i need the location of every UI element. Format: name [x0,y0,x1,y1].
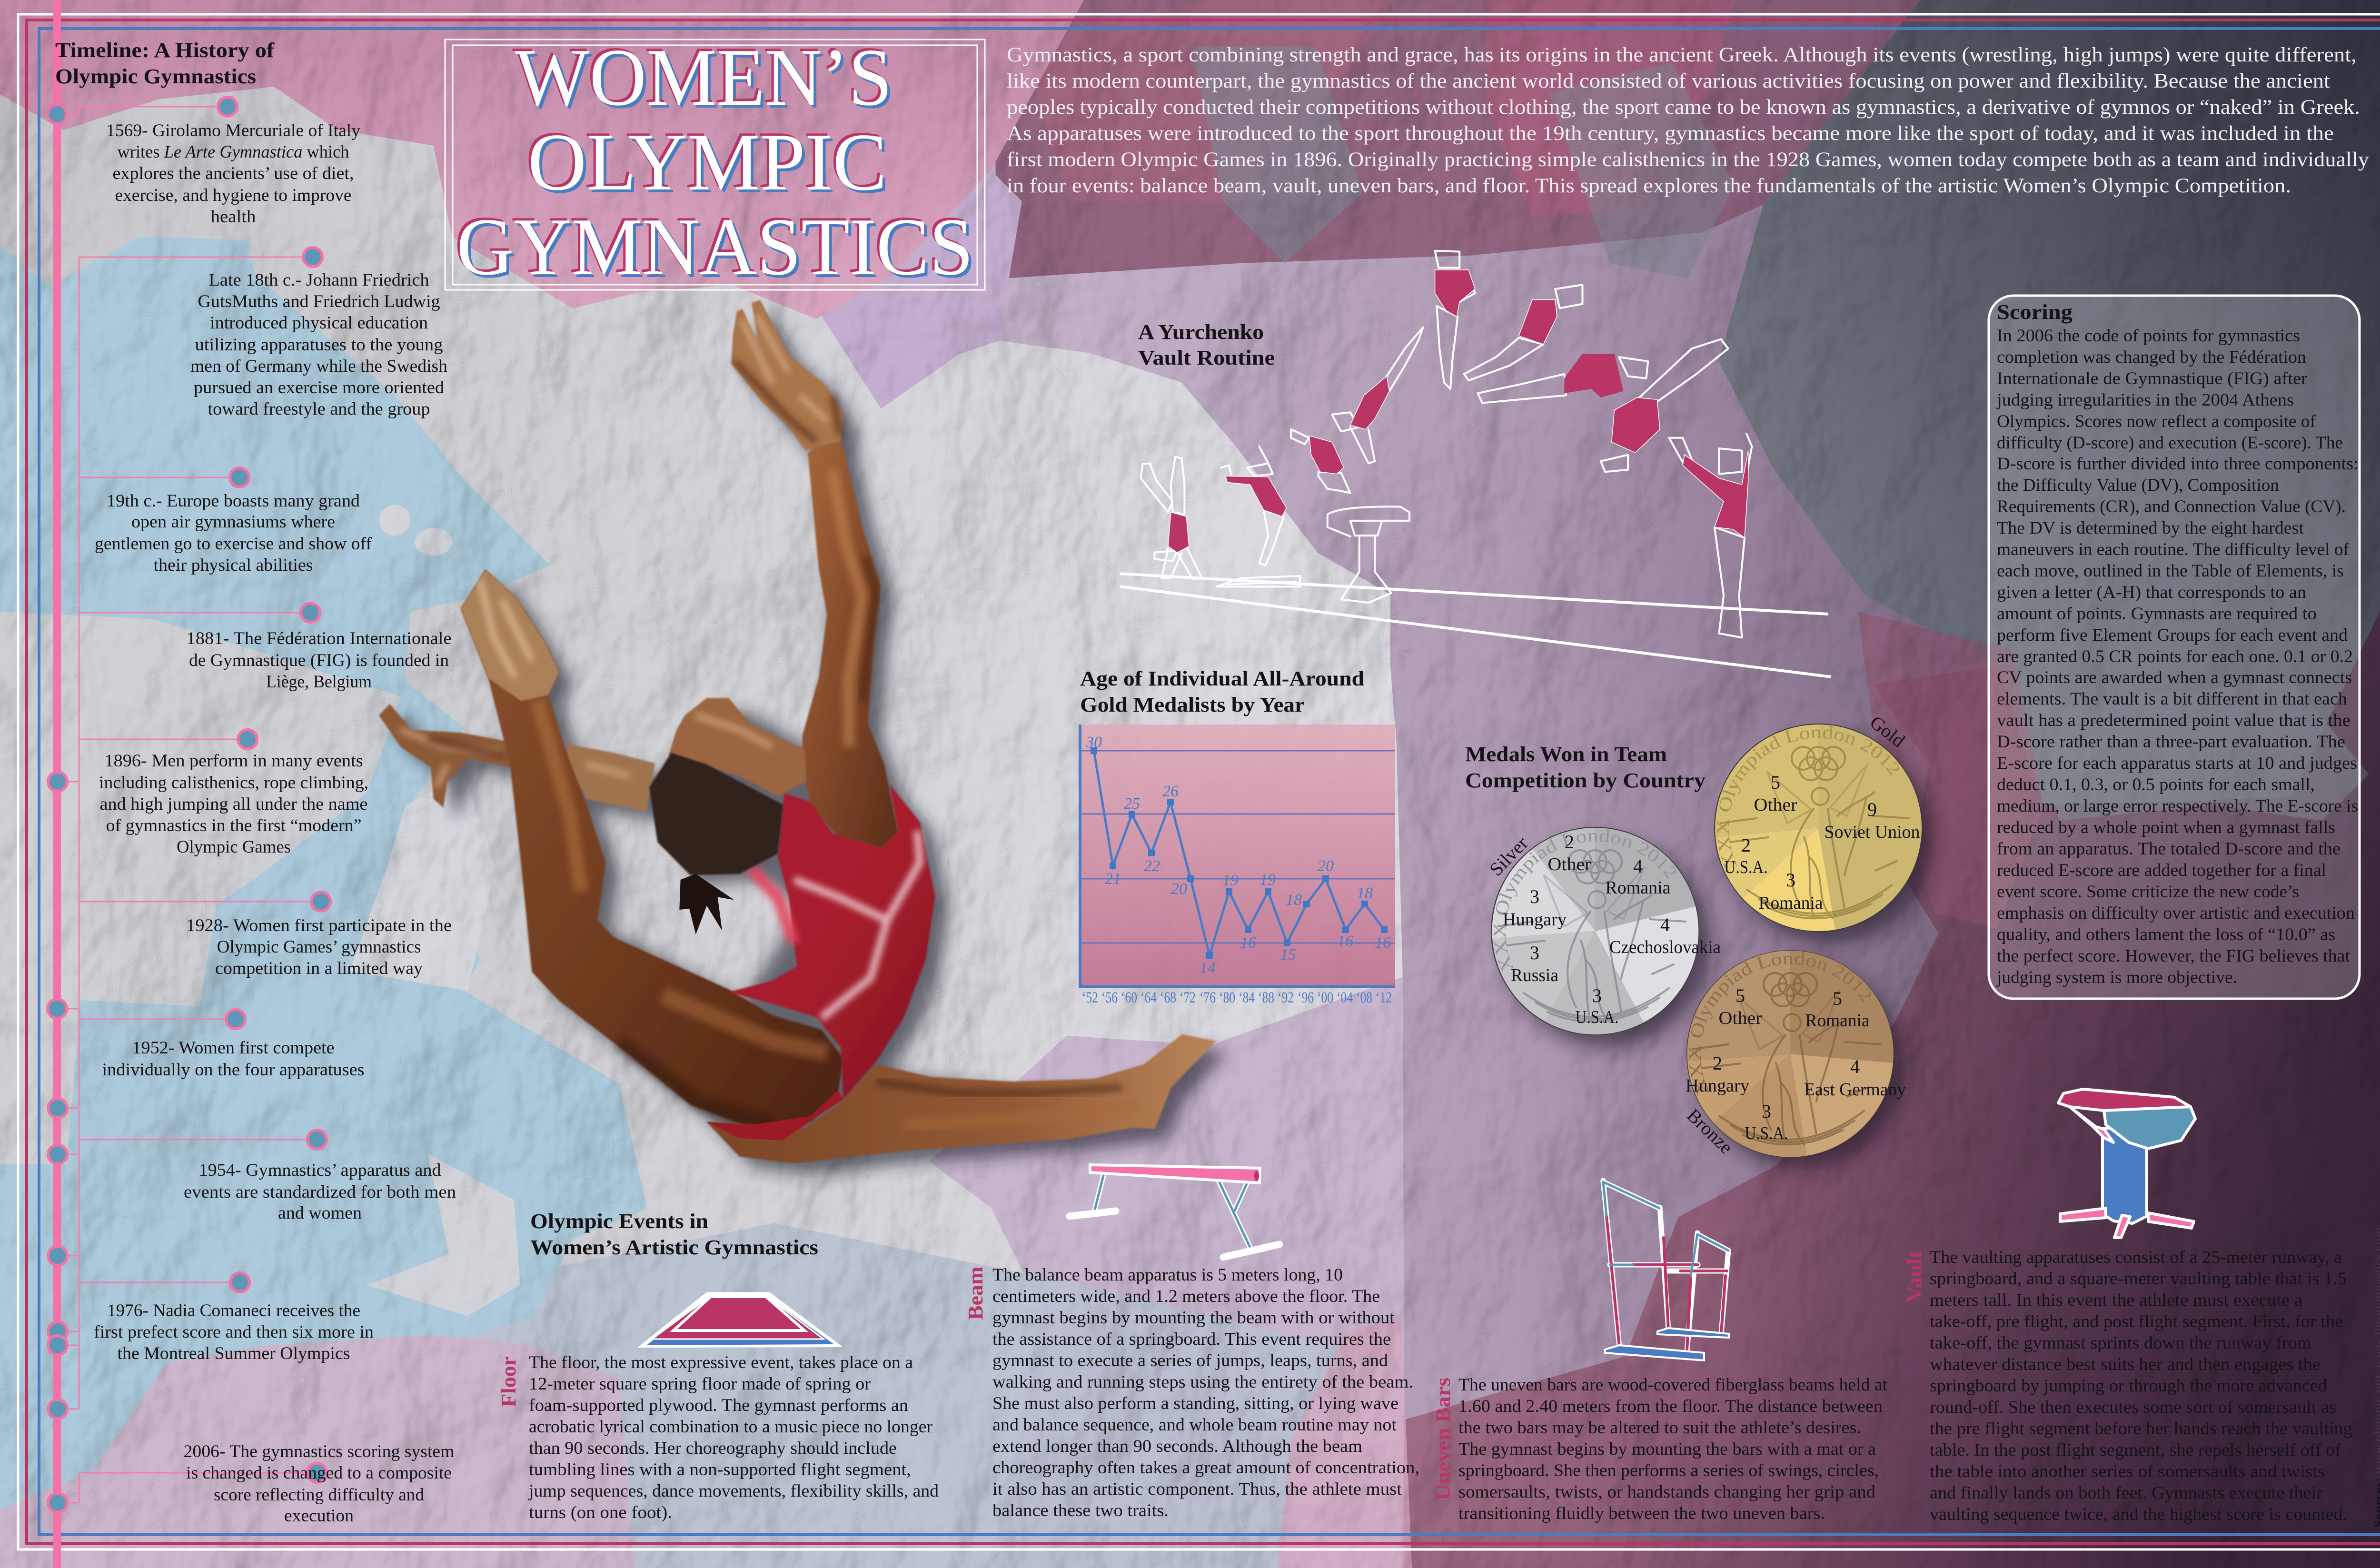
line chart: age by year: ‘60 [1121,989,1137,1006]
red leotard [707,784,935,1141]
medal pie chart: bronze: 2 [1713,1052,1722,1074]
line chart: age by year: 18 [1357,884,1373,902]
intro paragraph [1007,44,2370,197]
text: beam description: centimeters wide, and 1.2 meters above the floor. The [992,1287,1380,1306]
heading: age chart: Gold Medalists by Year [1080,693,1305,716]
title [445,30,985,295]
panel: scoring: difficulty (D-score) and execution (E-score). The [1997,433,2343,453]
text: beam description: it also has an artistic component. Thus, the athlete must [992,1479,1402,1499]
heading: A Yurchenko Vault Routine: A Yurchenko [1138,320,1264,344]
medal pie chart: bronze [1683,948,1906,1169]
panel: scoring: Requirements (CR), and Connection Value (CV). [1997,497,2346,516]
gymnast drop shadow [393,315,1228,1174]
medal pie chart: gold: Romania [1758,893,1823,913]
text: beam description: the assistance of a springboard. This event requires the [992,1330,1391,1349]
panel: scoring: amount of points. Gymnasts are required to [1997,604,2317,624]
timeline entry: 1976: 1976- Nadia Comaneci receives the [107,1300,360,1320]
intro paragraph: like its modern counterpart, the gymnastics of the ancient world consisted of various activities focusing on power and flexibility. Because the ancient [1007,70,2330,92]
text: vault description: meters tall. In this event the athlete must execute a [1930,1290,2302,1310]
timeline entry: late 18th century: GutsMuths and Friedrich Ludwig [198,291,440,311]
text: uneven bars description [1458,1375,1888,1523]
timeline axis [48,0,330,1568]
panel: scoring: elements. The vault is a bit different in that each [1997,689,2347,709]
springboard outline [1216,576,1300,586]
timeline entry: 1976: the Montreal Summer Olympics [117,1343,350,1363]
medal pie chart: gold: Soviet Union [1824,822,1920,842]
text: beam description: extend longer than 90 seconds. Although the beam [992,1437,1362,1456]
line chart: age by year: ‘52 [1082,989,1098,1006]
section label: Uneven Bars: Uneven Bars [1431,1378,1455,1500]
text: vault description: take-off, pre flight, and post flight segment. First, for the [1930,1312,2343,1331]
timeline entry: 1928 [186,915,452,978]
medal pie chart: bronze: Bronze [1683,1104,1737,1158]
timeline entry: 19th century [95,491,372,575]
medal pie chart: bronze: Hungary [1686,1076,1749,1096]
panel: scoring: vault has a predetermined point value that is the [1997,711,2350,730]
medal pie chart: silver: 4 [1660,914,1670,935]
text: vault description: and finally lands on both feet. Gymnasts execute their [1930,1483,2323,1503]
medal pie chart: bronze: U.S.A. [1745,1123,1788,1143]
title: OLYMPIC [527,117,887,208]
timeline entry: 1569: writes Le Arte Gymnastica which [117,142,349,161]
text: vault description: table. In the post flight segment, she repels herself off of [1930,1440,2341,1460]
text: vault description: round-off. She then executes some sort of somersault as [1930,1398,2336,1417]
figure 2: round-off [1221,447,1287,566]
raised leg and thigh [461,569,843,1128]
heading: age chart [1080,667,1364,716]
icon: uneven bars [1603,1181,1729,1360]
timeline entry: 1952 [102,1038,365,1079]
panel: scoring: E-score for each apparatus starts at 10 and judges [1997,754,2357,773]
timeline entry: 1881 [187,628,451,691]
heading: medals: Competition by Country [1465,769,1706,792]
timeline entry: 19th century: 19th c.- Europe boasts many grand [107,491,360,510]
head and hair [649,698,806,934]
timeline entry: 1569 [106,120,361,226]
timeline entry: 1952: 1952- Women first compete [132,1038,334,1057]
intro paragraph: peoples typically conducted their competitions without clothing, the sport came to be known as gymnastics, a derivative of gymnos or “naked” in Greek. [1007,96,2360,119]
medal pie chart: silver: Romania [1605,878,1671,898]
timeline entry: 1954: 1954- Gymnastics’ apparatus and [199,1160,441,1180]
panel: scoring: D-score rather than a three-part evaluation. The [1997,732,2345,752]
medal pie chart: silver: Other [1548,854,1591,874]
panel: scoring: judging irregularities in the 2004 Athens [1996,390,2294,410]
icon: floor mat [637,1292,843,1348]
timeline entry: 1928: competition in a limited way [215,958,423,978]
timeline entry: late 18th century: introduced physical education [210,313,428,332]
text: floor description: tumbling lines with a non-supported flight segment, [529,1460,911,1479]
line chart: age by year [1080,724,1395,1006]
title: GYMNASTICS [454,199,971,290]
medal pie chart: silver: 4 [1633,855,1643,877]
timeline entry: 1896: Olympic Games [177,837,291,856]
icon: balance beam [1070,1165,1279,1257]
line chart: age by year: ‘96 [1298,989,1314,1006]
timeline entry: 1952: individually on the four apparatuses [102,1060,365,1079]
text: uneven bars description: The gymnast begins by mounting the bars with a mat or a [1458,1439,1876,1459]
medal pie chart: gold: Other [1754,795,1797,815]
medal pie chart: silver: Silver [1485,833,1532,880]
intro paragraph: As apparatuses were introduced to the sport throughout the 19th century, gymnastics became more like the sport of today, and it was included in the [1007,122,2334,145]
text: beam description: walking and running steps using the entirety of the beam. [992,1372,1413,1392]
panel: scoring: In 2006 the code of points for gymnastics [1997,326,2300,346]
timeline entry: late 18th century: toward freestyle and the group [208,399,430,418]
panel: scoring: the perfect score. However, the FIG believes that [1997,946,2350,966]
medal pie chart: bronze: 4 [1850,1056,1860,1077]
line chart: age by year: ‘84 [1239,989,1255,1006]
timeline entry: 2006: score reflecting difficulty and [214,1485,424,1504]
medal pie chart: bronze: XXX Olympiad London 2012 [1685,948,1876,1098]
medal pie chart: gold: U.S.A. [1724,857,1768,877]
timeline entry: 2006: 2006- The gymnastics scoring system [184,1441,454,1461]
line chart: age by year: 21 [1105,870,1121,888]
line chart: age by year: ‘80 [1219,989,1235,1006]
timeline entry: late 18th century: utilizing apparatuses to the young [195,335,443,354]
figure 1: handstand on runway [1141,457,1202,579]
heading: age chart: Age of Individual All-Around [1080,667,1364,690]
panel: scoring: perform five Element Groups for each event and [1997,625,2348,645]
panel: scoring: are granted 0.5 CR points for each one. 0.1 or 0.2 [1997,647,2353,666]
timeline entry: 1976 [94,1300,374,1363]
section label: Beam: Beam [964,1267,987,1320]
panel: scoring: quality, and others lament the loss of “10.0” as [1997,925,2335,944]
medal pie chart: bronze: Other [1718,1008,1762,1028]
panel: scoring: given a letter (A-H) that corresponds to an [1997,583,2306,602]
panel: scoring: Olympics. Scores now reflect a composite of [1997,412,2316,431]
text: uneven bars description: somersaults, twists, or handstands changing her grip and [1458,1482,1875,1502]
panel: scoring: medium, or large error respectively. The E-score is [1997,796,2358,816]
text: beam description: She must also perform a standing, sitting, or lying wave [992,1394,1398,1413]
panel: scoring: reduced E-score are added together for a final [1997,861,2326,880]
figure 8: inverted descent [1601,339,1728,472]
text: vault description: vaulting sequence twice, and the highest score is counted. [1930,1505,2347,1524]
figure 9: landing [1669,434,1752,638]
panel: scoring: judging system is more objective. [1996,968,2237,987]
raised arm and hand [731,300,898,848]
panel: scoring: Internationale de Gymnastique (FIG) after [1997,369,2308,388]
title: GYMNASTICS [456,202,973,292]
heading: Olympic events: Olympic Events in [530,1210,708,1233]
timeline entry: 1928: Olympic Games’ gymnastics [217,937,421,956]
figure 5: rising vertical [1435,251,1475,389]
text: beam description: choreography often takes a great amount of concentration, [992,1458,1419,1478]
text: floor description: turns (on one foot). [529,1503,672,1522]
timeline heading [55,39,275,88]
text: vault description: the pre flight segment before her hands reach the vaulting [1930,1419,2352,1439]
panel: scoring: maneuvers in each routine. The difficulty level of [1997,540,2350,559]
title: OLYMPIC [526,115,884,205]
line chart: age by year: 18 [1286,891,1302,909]
intro paragraph: in four events: balance beam, vault, uneven bars, and floor. This spread explores the fundamentals of the artistic Women’s Olympic Competition. [1007,175,2291,197]
timeline entry: 1569: explores the ancients’ use of diet, [112,163,354,183]
text: floor description: jump sequences, dance movements, flexibility skills, and [528,1481,939,1501]
panel: scoring [1989,296,2360,999]
title: WOMEN’S [518,35,895,126]
text: uneven bars description: transitioning fluidly between the two uneven bars. [1458,1504,1825,1523]
text: floor description [528,1353,939,1522]
line chart: age by year: ‘00 [1317,989,1333,1006]
timeline entry: 1896: of gymnastics in the first “modern” [106,815,362,835]
timeline entry: 19th century: open air gymnasiums where [131,512,335,531]
text: beam description: gymnast to execute a series of jumps, leaps, turns, and [992,1351,1388,1370]
text: floor description: 12-meter square spring floor made of spring or [529,1374,871,1394]
panel: scoring: from an apparatus. The totaled D-score and the [1997,839,2340,859]
title: GYMNASTICS [459,205,976,295]
medal pie chart: silver: Hungary [1503,910,1567,930]
line chart: age by year: 14 [1200,959,1216,977]
timeline entry: 1896: including calisthenics, rope climbing, [99,773,368,792]
title: WOMEN’S [512,30,890,120]
back arm and hand [379,704,655,812]
panel: scoring: event score. Some criticize the new code’s [1997,882,2299,902]
panel: scoring: completion was changed by the Fédération [1997,347,2306,367]
timeline entry: late 18th century: Late 18th c.- Johann Friedrich [208,270,429,289]
timeline heading: Olympic Gymnastics [55,65,256,88]
line chart: age by year: 20 [1171,880,1187,898]
timeline entry: 2006: execution [284,1506,354,1525]
text: beam description: and balance sequence, and whole beam routine may not [992,1415,1397,1435]
timeline entry: 1881: de Gymnastique (FIG) is founded in [189,650,449,670]
timeline entry: 1954 [184,1160,456,1222]
text: floor description: foam-supported plywood. The gymnast performs an [529,1396,908,1415]
timeline entry: 2006 [184,1441,454,1525]
timeline entry: 1896: 1896- Men perform in many events [105,751,363,770]
text: vault description: whatever distance best suits her and then engages the [1930,1355,2320,1374]
medal pie chart: gold: 5 [1771,772,1780,793]
figure 6: twisting [1464,285,1583,380]
text: vault description: springboard by jumping or through the more advanced [1930,1376,2327,1396]
heading: A Yurchenko Vault Routine [1138,320,1275,369]
timeline entry: 19th century: gentlemen go to exercise and show off [95,534,372,553]
medal pie chart: silver: Russia [1511,965,1558,985]
text: beam description [992,1265,1419,1520]
section label: Floor: Floor [497,1356,520,1407]
text: uneven bars description: The uneven bars are wood-covered fiberglass beams held at [1458,1375,1888,1395]
title: WOMEN’S [515,32,892,123]
intro paragraph: Gymnastics, a sport combining strength and grace, has its origins in the ancient Greek. Although its events (wrestling, high jumps) were quite different, [1007,44,2357,66]
timeline entry: 2006: is changed is changed to a composite [186,1463,452,1482]
medal pie chart: bronze: 3 [1762,1101,1771,1122]
text: vault description: take-off, the gymnast sprints down the runway from [1930,1333,2311,1353]
text: floor description: The floor, the most expressive event, takes place on a [529,1353,913,1372]
text: vault description [1930,1248,2352,1524]
timeline entry: 1954: and women [278,1203,362,1222]
medal pie chart: silver [1485,825,1721,1047]
heading: medals [1465,743,1706,792]
timeline entry: 1954: events are standardized for both men [184,1182,456,1201]
panel: scoring: each move, outlined in the Table of Elements, is [1997,561,2344,581]
panel: scoring: deduct 0.1, 0.3, or 0.5 points for each small, [1997,775,2315,794]
line chart: age by year: 19 [1222,872,1239,889]
timeline entry: late 18th century: pursued an exercise more oriented [194,377,444,397]
timeline heading: Timeline: A History of [55,39,275,62]
text: beam description: balance these two traits. [992,1501,1169,1520]
medal pie chart: gold: XXX Olympiad London 2012 [1713,722,1904,872]
icon: vaulting table [2058,1089,2195,1238]
heading: A Yurchenko Vault Routine: Vault Routine [1138,346,1275,369]
medal pie chart: silver: U.S.A. [1576,1007,1618,1027]
medal pie chart: silver: 3 [1592,985,1602,1006]
line chart: age by year: 16 [1240,934,1256,952]
panel: scoring: reduced by a whole point when a gymnast falls [1997,818,2335,837]
medal pie chart: bronze: 5 [1735,985,1745,1006]
panel: scoring: Scoring [1997,300,2073,324]
line chart: age by year: ‘12 [1376,989,1392,1006]
medal pie chart: silver: XXX Olympiad London 2012 [1490,825,1681,975]
panel: scoring: CV points are awarded when a gymnast connects [1997,668,2352,687]
timeline entry: 1976: first prefect score and then six more in [94,1322,374,1341]
panel: scoring: emphasis on difficulty over artistic and execution [1997,903,2355,923]
medal pie chart: bronze: East Germany [1804,1080,1906,1100]
vaulting table outline [1328,506,1409,603]
text: vault description: The vaulting apparatuses consist of a 25-meter runway, a [1930,1248,2342,1267]
medal pie chart: gold: 3 [1786,869,1795,891]
figure 4: flight to table [1332,327,1423,463]
timeline entry: 1569: health [210,207,256,226]
text: floor description: acrobatic lyrical combination to a music piece no longer [529,1417,933,1437]
line chart: age by year: 15 [1280,946,1296,963]
line chart: age by year: ‘72 [1180,989,1196,1006]
figure 3: back handspring [1291,429,1350,493]
text: uneven bars description: springboard. She then performs a series of swings, circles, [1458,1461,1879,1480]
timeline entry: 1928: 1928- Women first participate in the [186,915,452,935]
text: uneven bars description: 1.60 and 2.40 meters from the floor. The distance between [1458,1397,1883,1416]
line chart: age by year: ‘08 [1356,989,1372,1006]
timeline entry: 19th century: their physical abilities [153,555,313,575]
line chart: age by year: 30 [1085,734,1102,751]
text: beam description: gymnast begins by mounting the beam with or without [992,1308,1395,1328]
line chart: age by year: ‘68 [1160,989,1176,1006]
heading: Olympic events: Women’s Artistic Gymnastics [530,1236,818,1259]
vault routine sequence diagram [1120,251,1831,677]
line chart: age by year: ‘56 [1101,989,1118,1006]
medal pie chart: bronze: 5 [1833,988,1842,1009]
timeline entry: 1881: 1881- The Fédération Internationale [187,628,451,648]
text: vault description: springboard, and a square-meter vaulting table that is 1.5 [1930,1269,2347,1289]
timeline entry: 1569: exercise, and hygiene to improve [115,185,351,205]
heading: medals: Medals Won in Team [1465,743,1667,766]
forward leg and foot [707,1034,1216,1163]
text: vault description: the table into another series of somersaults and twists [1930,1462,2325,1481]
timeline entry: 1881: Liège, Belgium [266,672,372,691]
text: floor description: than 90 seconds. Her choreography should include [529,1439,897,1458]
text: beam description: The balance beam apparatus is 5 meters long, 10 [992,1265,1343,1285]
line chart: age by year: ‘76 [1200,989,1216,1006]
medal pie chart: gold: Gold [1866,711,1909,752]
medal pie chart: gold: 2 [1741,834,1751,856]
panel: scoring: The DV is determined by the eight hardest [1997,518,2304,538]
intro paragraph: first modern Olympic Games in 1896. Originally practicing simple calisthenics in the 1928 Games, women today compete both as a team and individually [1007,149,2370,171]
line chart: age by year: ‘64 [1140,989,1157,1006]
line chart: age by year: ‘88 [1258,989,1274,1006]
timeline entry: late 18th century [190,270,447,418]
timeline entry: 1569: 1569- Girolamo Mercuriale of Italy [106,120,361,140]
medal pie chart: silver: 3 [1530,886,1539,907]
medal pie chart: silver: 3 [1530,942,1539,963]
gymnast illustration [379,300,1228,1174]
medal pie chart: silver: 2 [1565,831,1574,853]
medal pie chart: gold [1713,711,1934,943]
line chart: age by year: ‘04 [1337,989,1353,1006]
line chart: age by year: 25 [1124,795,1140,813]
medal pie chart: gold: 9 [1867,799,1877,820]
medal pie chart: silver: Czechoslovakia [1609,937,1721,957]
medal pie chart: bronze: Romania [1805,1011,1870,1031]
text: uneven bars description: the two bars may be altered to suit the athlete’s desires. [1458,1418,1861,1438]
line chart: age by year: 16 [1337,933,1353,950]
panel: scoring: D-score is further divided into three components: [1997,454,2359,474]
timeline entry: 1896: and high jumping all under the name [100,794,368,814]
line chart: age by year: 19 [1259,871,1276,889]
line chart: age by year: 20 [1318,857,1334,875]
title: OLYMPIC [530,120,890,210]
heading: Olympic events [530,1210,818,1259]
timeline entry: late 18th century: men of Germany while the Swedish [190,356,447,376]
line chart: age by year: 16 [1375,934,1391,952]
line chart: age by year: ‘92 [1278,989,1294,1006]
figure 7: horizontal layout [1478,354,1648,403]
line chart: age by year: 26 [1162,783,1179,800]
panel: scoring: the Difficulty Value (DV), Composition [1997,476,2279,495]
timeline entry: 1896 [99,751,368,856]
section label: Vault: Vault [1903,1251,1926,1302]
line chart: age by year: 22 [1144,857,1160,875]
